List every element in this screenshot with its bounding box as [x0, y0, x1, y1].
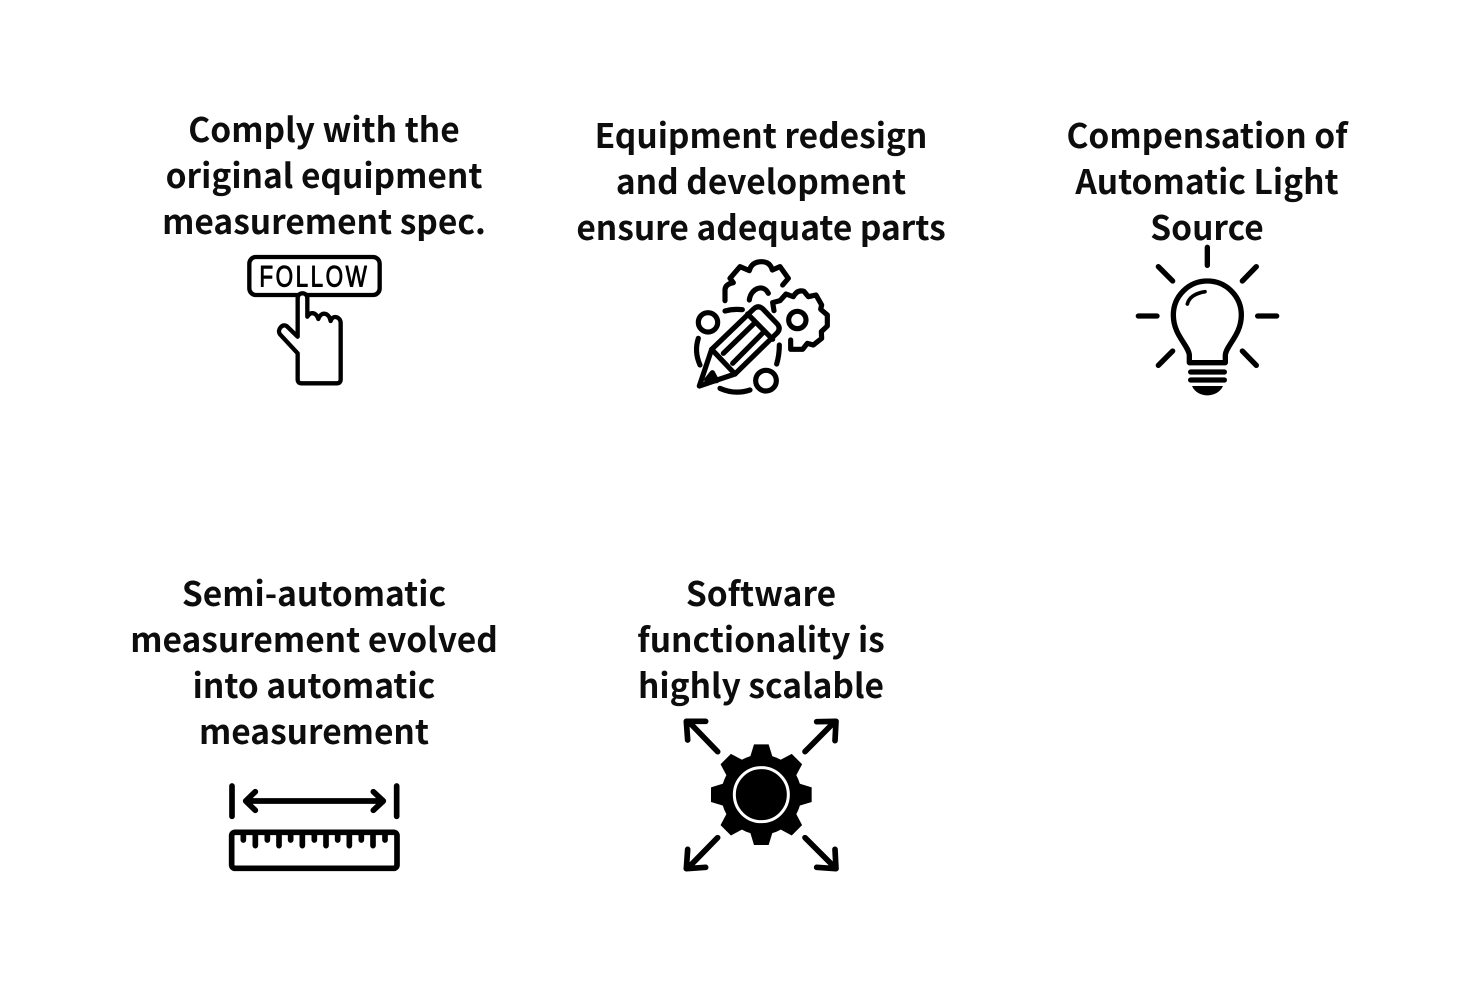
heading: comply with original spec: original equipment [166, 149, 482, 198]
heading: software functionality [637, 567, 885, 708]
heading: compensation of automatic light source [1066, 109, 1349, 250]
icon: follow button with pointing hand: FOLLOW [259, 260, 369, 293]
icon: gear with four outward arrows [686, 721, 836, 869]
heading: semi-automatic measurement [130, 567, 498, 754]
heading: semi-automatic measurement: measurement evolved [130, 613, 498, 662]
heading: equipment redesign: Equipment redesign [595, 109, 927, 158]
icon: ruler with double arrow [232, 786, 397, 868]
heading: semi-automatic measurement: into automatic [193, 659, 435, 708]
heading: comply with original spec: measurement spec. [162, 195, 486, 244]
heading: software functionality: highly scalable [638, 659, 884, 708]
heading: compensation of automatic light source: Compensation of [1066, 109, 1349, 158]
heading: comply with original spec [162, 103, 486, 244]
heading: software functionality: functionality is [637, 613, 885, 662]
heading: semi-automatic measurement: measurement [199, 705, 429, 754]
heading: equipment redesign: and development [616, 155, 906, 204]
icon: follow button with pointing hand [249, 257, 380, 383]
heading: compensation of automatic light source: Source [1150, 201, 1264, 250]
heading: compensation of automatic light source: Automatic Light [1074, 155, 1339, 204]
heading: equipment redesign [576, 109, 946, 250]
icon: pencil with gears [697, 262, 827, 392]
heading: comply with original spec: Comply with the [188, 103, 460, 152]
heading: semi-automatic measurement: Semi-automatic [182, 567, 446, 616]
heading: equipment redesign: ensure adequate parts [576, 201, 946, 250]
heading: software functionality: Software [686, 567, 836, 616]
icon: light bulb [1138, 247, 1277, 395]
